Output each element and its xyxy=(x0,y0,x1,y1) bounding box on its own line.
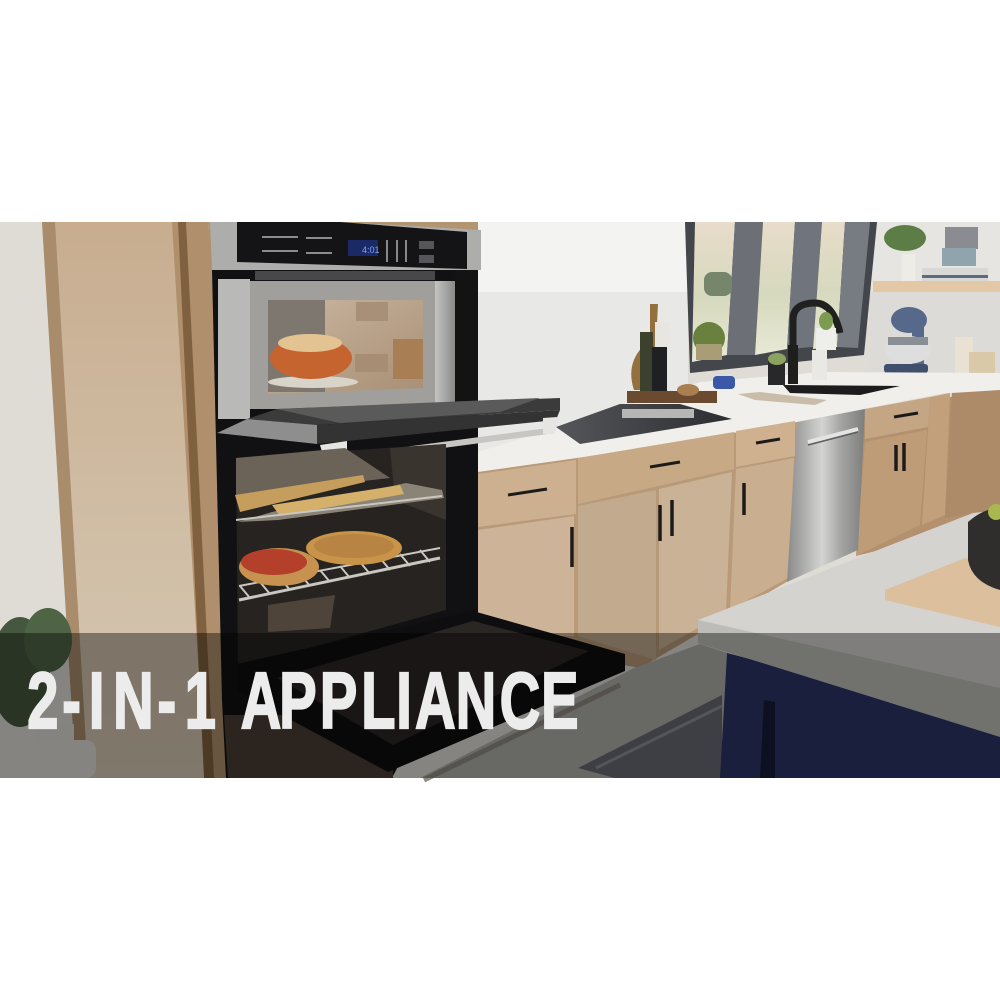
countertop xyxy=(478,372,1000,472)
photo: walls xyxy=(0,222,1000,778)
microwave cavity xyxy=(218,270,478,430)
floor and rug xyxy=(420,644,727,778)
microwave door xyxy=(217,398,560,444)
oven control panel: 4:01 xyxy=(362,245,380,255)
panel: lower cabinets xyxy=(478,390,1000,668)
food: garlic bread tray xyxy=(235,475,444,522)
faucet xyxy=(788,303,840,384)
sink xyxy=(783,385,900,395)
panel: kitchen window xyxy=(685,222,877,373)
panel below oven xyxy=(224,715,393,778)
canisters xyxy=(955,337,995,375)
vent strip xyxy=(255,271,435,280)
open oven door xyxy=(237,611,625,780)
soap and plants xyxy=(693,312,836,385)
panel: kitchen island xyxy=(698,504,1000,778)
lower oven cavity xyxy=(236,444,446,668)
oven control panel xyxy=(210,222,481,270)
countertop items xyxy=(627,304,827,405)
oven racks xyxy=(236,496,442,600)
food: pizzas xyxy=(239,531,402,586)
plant and vase at lower left xyxy=(0,608,96,778)
translucent caption band xyxy=(0,633,1000,778)
dishwasher xyxy=(787,409,865,582)
panel: tall wood cabinet xyxy=(42,222,478,778)
door handle xyxy=(320,417,557,472)
panel: oven body xyxy=(210,222,625,780)
cooktop xyxy=(556,404,732,444)
stand mixer xyxy=(884,307,931,373)
shelf with decor xyxy=(873,225,1000,292)
food: lasagna xyxy=(268,334,358,388)
heading: 2-IN-1 APPLIANCE xyxy=(27,655,578,745)
